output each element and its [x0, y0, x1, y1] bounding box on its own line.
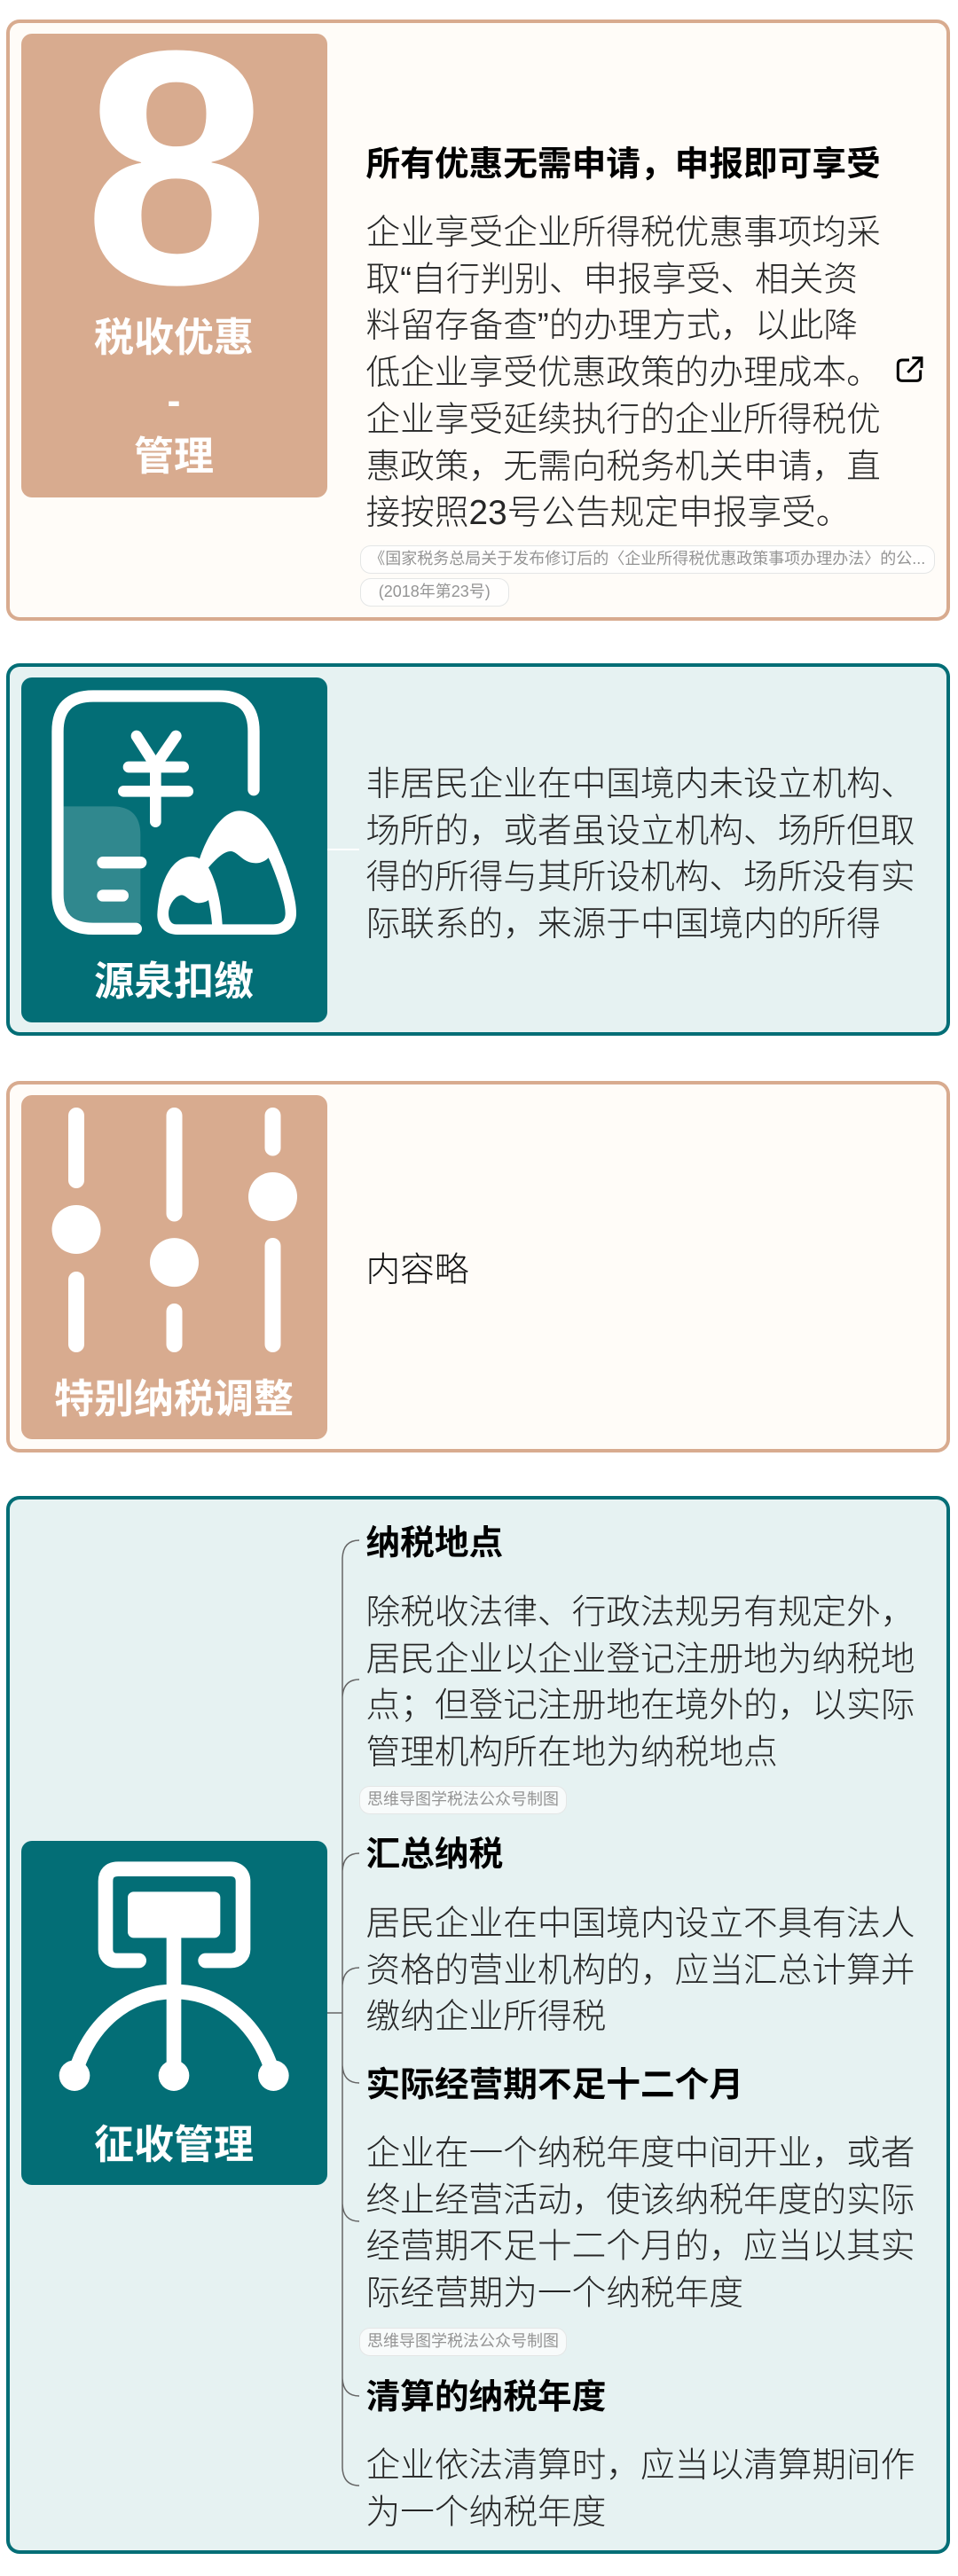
body text	[365, 1905, 915, 2036]
body text: 企业享受延续执行的企业所得税优	[365, 401, 881, 439]
panel: tax incentives	[6, 20, 950, 621]
icon: sliders	[51, 1108, 297, 1352]
heading: 纳税地点	[365, 1524, 503, 1562]
body text: 经营期不足十二个月的，应当以其实	[365, 2228, 915, 2266]
body text	[365, 2447, 915, 2532]
citation chip 2	[360, 578, 509, 607]
body text: 企业在一个纳税年度中间开业，或者	[365, 2134, 915, 2173]
body text	[365, 214, 881, 532]
body text: 低企业享受优惠政策的办理成本。	[365, 354, 881, 392]
body text: 企业享受企业所得税优惠事项均采	[365, 214, 881, 252]
body text: 管理机构所在地为纳税地点	[365, 1734, 778, 1772]
body text: 缴纳企业所得税	[365, 1998, 606, 2036]
branch: tax location	[359, 1524, 915, 1814]
citation chip 1	[360, 545, 935, 574]
heading: 所有优惠无需申请，申报即可享受	[365, 145, 881, 184]
body text: 接按照23号公告规定申报享受。	[365, 494, 850, 532]
body text: 企业依法清算时，应当以清算期间作	[365, 2447, 915, 2485]
label: dash: -	[167, 378, 181, 423]
heading: 汇总纳税	[365, 1836, 503, 1874]
body text: 终止经营活动，使该纳税年度的实际	[365, 2181, 915, 2220]
body text: 除税收法律、行政法规另有规定外，	[365, 1593, 915, 1632]
icon: org tree	[59, 1861, 289, 2091]
branch: less than twelve months	[359, 2066, 915, 2356]
body text: 居民企业在中国境内设立不具有法人	[365, 1905, 915, 1943]
source chip: 思维导图学税法公众号制图	[367, 1790, 559, 1808]
body text: 场所的，或者虽设立机构、场所但取	[365, 812, 915, 850]
body text: 内容略	[365, 1251, 469, 1289]
label box: special tax adjustment	[21, 1095, 326, 1439]
panel: withholding	[6, 663, 950, 1036]
body text	[365, 765, 915, 943]
label: special tax adjustment: 特别纳税调整	[54, 1376, 294, 1421]
label box: collection management	[21, 1841, 326, 2185]
panel: collection management	[6, 1496, 950, 2554]
label box: 8 tax incentives	[21, 34, 326, 497]
body text: 取“自行判别、申报享受、相关资	[365, 261, 858, 299]
label box: withholding	[21, 677, 326, 1022]
label: collection management: 征收管理	[94, 2122, 254, 2167]
body text: 资格的营业机构的，应当汇总计算并	[365, 1952, 915, 1990]
branch: consolidated payment	[365, 1836, 915, 2036]
body text: 料留存备查”的办理方式，以此降	[365, 307, 858, 345]
connector	[327, 849, 359, 850]
body text: 际经营期为一个纳税年度	[365, 2275, 743, 2313]
heading: 实际经营期不足十二个月	[365, 2066, 743, 2104]
icon: external link	[896, 356, 923, 382]
body text: 为一个纳税年度	[365, 2494, 606, 2532]
body text: 惠政策，无需向税务机关申请，直	[365, 448, 881, 486]
body text: 居民企业以企业登记注册地为纳税地	[365, 1640, 915, 1679]
label: tax incentives: 税收优惠	[94, 315, 254, 360]
citation chip 2: (2018年第23号)	[379, 582, 491, 599]
label: withholding: 源泉扣缴	[94, 959, 254, 1004]
label: management: 管理	[134, 434, 214, 479]
source chip: 思维导图学税法公众号制图	[367, 2332, 559, 2350]
icon: yen document and mountains	[51, 690, 296, 935]
panel: special tax adjustment	[6, 1081, 950, 1452]
body text: 非居民企业在中国境内未设立机构、	[365, 765, 915, 803]
body text	[365, 1593, 915, 1772]
source chip	[359, 2328, 567, 2356]
body text	[365, 2134, 915, 2313]
source chip	[359, 1786, 567, 1814]
body text: 得的所得与其所设机构、场所没有实	[365, 858, 915, 897]
citation chip 1: 《国家税务总局关于发布修订后的〈企业所得税优惠政策事项办理办法〉的公...	[369, 550, 925, 568]
body text: 际联系的，来源于中国境内的所得	[365, 905, 881, 943]
heading: 清算的纳税年度	[365, 2378, 606, 2416]
body text: 点；但登记注册地在境外的，以实际	[365, 1687, 915, 1725]
branch: liquidation tax year	[365, 2378, 915, 2532]
